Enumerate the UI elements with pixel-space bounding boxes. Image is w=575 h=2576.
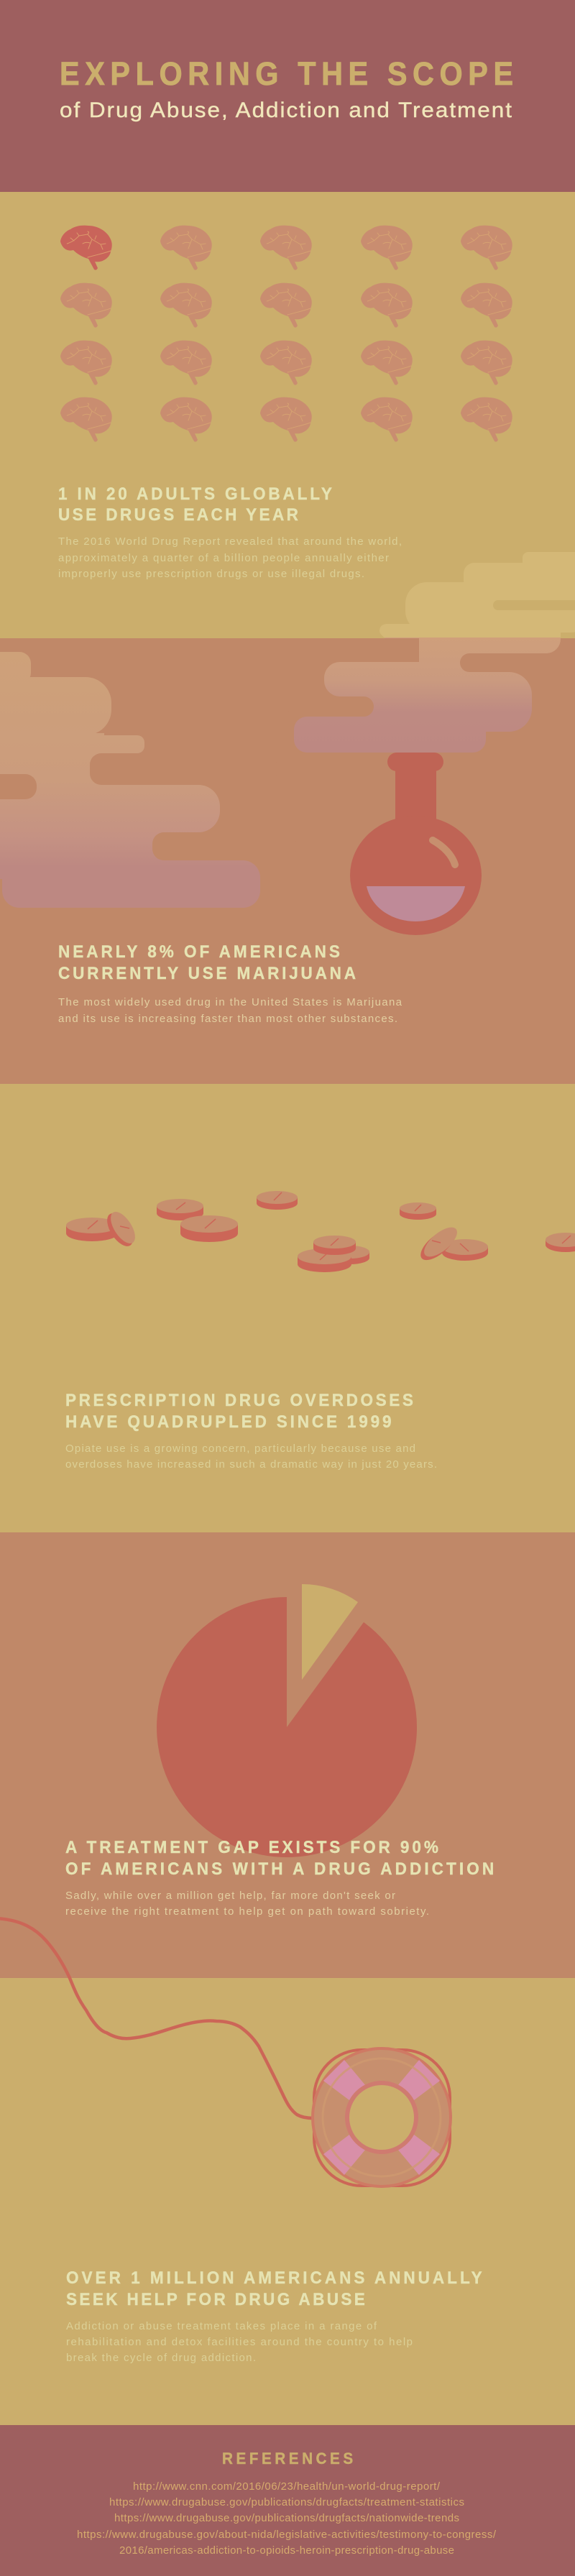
text block: treatment gap: receive the right treatment to help get on path toward sobriety.	[65, 1905, 429, 1918]
chart: pie 90 percent treatment gap	[157, 1584, 417, 1857]
icon: flask	[350, 753, 482, 935]
panel: global drug use background	[0, 192, 575, 638]
text block: reference links: http://www.cnn.com/2016/06/23/health/un-world-drug-report/	[133, 2480, 441, 2493]
pill 11 tilted	[415, 1222, 461, 1266]
text block: world drug report: improperly use prescription drugs or use illegal drugs.	[58, 568, 364, 580]
heading: treatment gap: A TREATMENT GAP EXISTS FOR 90%	[65, 1837, 438, 1857]
heading: 1 in 20 adults	[58, 484, 332, 524]
text block: treatment gap: Sadly, while over a million get help, far more don't seek or	[65, 1890, 395, 1902]
text block: seeking help: break the cycle of drug addiction.	[66, 2352, 256, 2364]
icon: highlighted brain	[60, 226, 112, 270]
pill 6	[400, 1202, 436, 1220]
title	[60, 56, 513, 122]
text block: marijuana	[58, 996, 402, 1025]
panel: marijuana background	[0, 638, 575, 1084]
heading: marijuana	[58, 942, 356, 983]
text block: seeking help	[66, 2320, 413, 2364]
text block: seeking help: rehabilitation and detox facilities around the country to help	[66, 2336, 413, 2348]
pie main slice	[157, 1597, 417, 1857]
heading: seeking help: SEEK HELP FOR DRUG ABUSE	[66, 2289, 365, 2309]
text block: treatment gap	[65, 1890, 429, 1918]
pill 12	[546, 1233, 575, 1252]
panel: prescription overdoses background	[0, 1084, 575, 1532]
text block: opiate use	[65, 1443, 437, 1471]
panel: references background	[0, 2425, 575, 2576]
pill 3	[157, 1199, 203, 1220]
heading: prescription overdoses: PRESCRIPTION DRUG OVERDOSES	[65, 1390, 413, 1409]
icon: brain row 2	[60, 283, 512, 328]
panel: treatment gap background	[0, 1532, 575, 1978]
text block: opiate use: overdoses have increased in such a dramatic way in just 20 years.	[65, 1458, 437, 1471]
heading: treatment gap: OF AMERICANS WITH A DRUG ADDICTION	[65, 1859, 494, 1878]
icon: brain row 4	[60, 397, 512, 442]
text block: reference links: 2016/americas-addiction-to-opioids-heroin-prescription-drug-abuse	[119, 2544, 454, 2557]
pill stack	[298, 1236, 369, 1272]
illustration: smoke cloud left	[0, 652, 296, 908]
text block: marijuana: The most widely used drug in the United States is Marijuana	[58, 996, 402, 1008]
brain grid: 1 in 20 pictogram	[60, 226, 512, 442]
ring pink bands	[323, 2060, 440, 2175]
icon: brain row 3	[60, 341, 512, 385]
panel: header background	[0, 0, 575, 192]
flask liquid	[367, 886, 465, 921]
heading: seeking help	[66, 2268, 482, 2309]
icon: life ring	[313, 2048, 451, 2186]
pill 1	[66, 1218, 118, 1241]
title: of Drug Abuse, Addiction and Treatment	[60, 98, 512, 122]
text block: reference links: https://www.drugabuse.gov/publications/drugfacts/treatment-statistics	[109, 2496, 464, 2508]
title: EXPLORING THE SCOPE	[60, 56, 513, 92]
text block: reference links: https://www.drugabuse.gov/publications/drugfacts/nationwide-trends	[114, 2512, 459, 2524]
heading: marijuana: NEARLY 8% OF AMERICANS	[58, 942, 340, 961]
pill 5	[257, 1191, 298, 1210]
pill 2 tilted	[102, 1208, 140, 1251]
heading: seeking help: OVER 1 MILLION AMERICANS ANNUALLY	[66, 2268, 482, 2287]
icon: brain row 1	[160, 226, 512, 270]
heading: treatment gap	[65, 1837, 494, 1878]
pill 10	[442, 1239, 488, 1261]
text block: marijuana: and its use is increasing faster than most other substances.	[58, 1013, 397, 1025]
flask highlight	[433, 840, 455, 865]
heading: 1 in 20 adults: USE DRUGS EACH YEAR	[58, 505, 298, 524]
text block: world drug report	[58, 535, 402, 580]
illustration: smoke cloud right	[288, 552, 575, 753]
heading: references: REFERENCES	[222, 2449, 353, 2467]
heading: prescription overdoses	[65, 1390, 413, 1431]
icon: rope	[0, 1918, 313, 2118]
heading: marijuana: CURRENTLY USE MARIJUANA	[58, 963, 356, 983]
heading: prescription overdoses: HAVE QUADRUPLED SINCE 1999	[65, 1412, 392, 1431]
pill 4	[180, 1215, 238, 1242]
text block: reference links: https://www.drugabuse.gov/about-nida/legislative-activities/testimony-to-congress/	[77, 2529, 497, 2541]
text block: world drug report: approximately a quarter of a billion people annually either	[58, 552, 389, 564]
text block: reference links	[77, 2480, 497, 2557]
illustration: scattered pills	[66, 1191, 575, 1272]
text block: seeking help: Addiction or abuse treatment takes place in a range of	[66, 2320, 377, 2332]
heading: 1 in 20 adults: 1 IN 20 ADULTS GLOBALLY	[58, 484, 332, 503]
text block: world drug report: The 2016 World Drug Report revealed that around the world,	[58, 535, 402, 548]
pie detached slice	[302, 1584, 358, 1680]
panel: seeking help background	[0, 1978, 575, 2425]
text block: opiate use: Opiate use is a growing concern, particularly because use and	[65, 1443, 415, 1455]
